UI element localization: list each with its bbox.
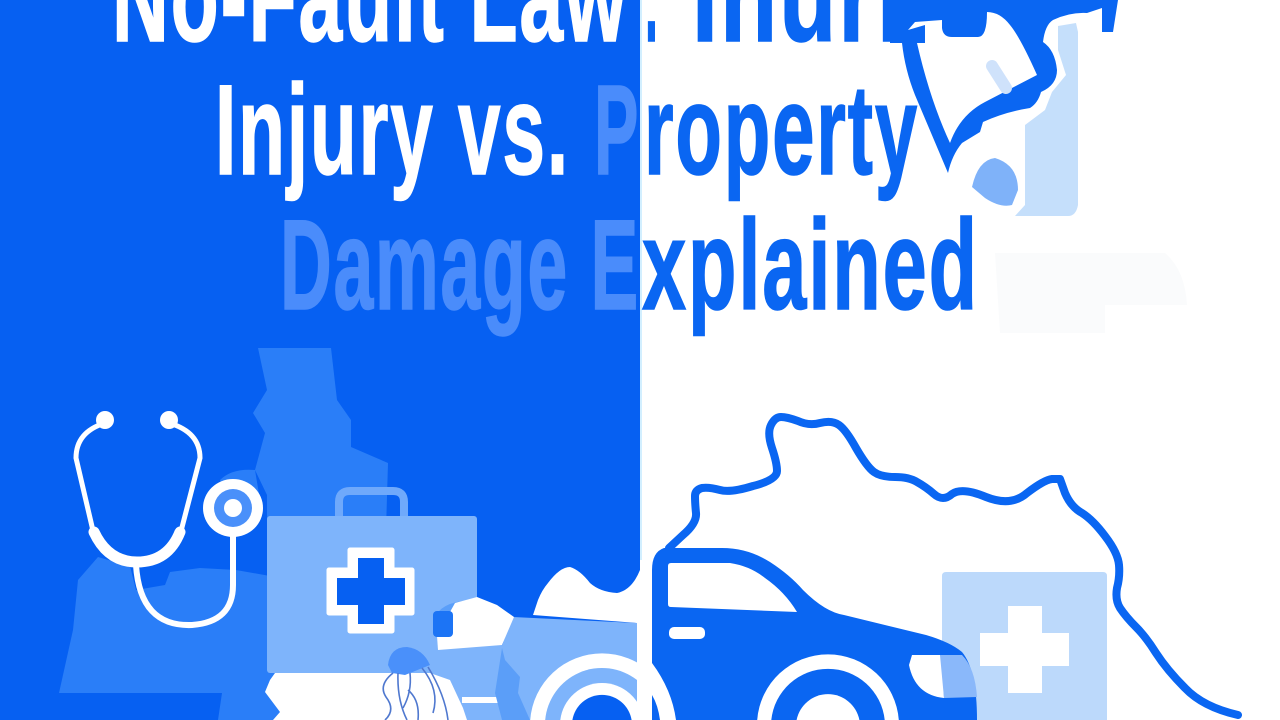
icon: medical kit — [267, 491, 477, 673]
pale medical card — [942, 572, 1107, 720]
wreckage: kit lower extension — [430, 645, 502, 720]
title line 3: xplained — [642, 194, 979, 337]
car wheel — [757, 654, 899, 720]
wreckage: small blue block — [433, 611, 453, 637]
rear wheel arc — [652, 663, 676, 720]
car window — [668, 563, 797, 612]
panel: blue left half — [0, 0, 640, 720]
pale medical card cross — [980, 606, 1069, 693]
silhouette: person behind medical kit — [59, 348, 388, 720]
concentric wheel rings — [530, 653, 674, 720]
wreckage: white debris right — [533, 560, 652, 720]
shield interior — [908, 12, 1037, 143]
jellyfish sketch — [383, 647, 448, 720]
car headlight — [909, 655, 944, 698]
title — [112, 0, 979, 337]
panel: top right medical icon — [890, 0, 1118, 216]
icon: stethoscope — [76, 411, 263, 625]
panel: medical illustration — [59, 348, 674, 720]
title line 2: P — [594, 59, 640, 202]
title line 2: roperty — [644, 59, 919, 202]
wreckage: block shade — [436, 600, 477, 615]
headlight overlap — [940, 655, 977, 698]
pale bottle shape — [1015, 23, 1078, 216]
panel: car illustration — [652, 417, 1238, 720]
faint grey smudge — [995, 253, 1187, 333]
round blob — [972, 158, 1018, 206]
pale tube inside shield — [992, 66, 1006, 88]
blue shield outline — [890, 0, 1118, 173]
wreckage: light blue panel — [495, 617, 637, 720]
wreckage: white bar — [462, 697, 498, 703]
car body — [652, 548, 977, 720]
title line 3: Damage E — [280, 194, 640, 337]
title line 2: Injury vs. — [215, 59, 570, 202]
mountain outline — [669, 417, 1238, 715]
wreckage: white debris centre — [437, 597, 514, 650]
car door handle — [669, 627, 705, 639]
wreckage: darker blob — [495, 648, 530, 720]
panel: white right half — [640, 0, 1280, 720]
wreckage: white debris bottom — [265, 673, 467, 720]
